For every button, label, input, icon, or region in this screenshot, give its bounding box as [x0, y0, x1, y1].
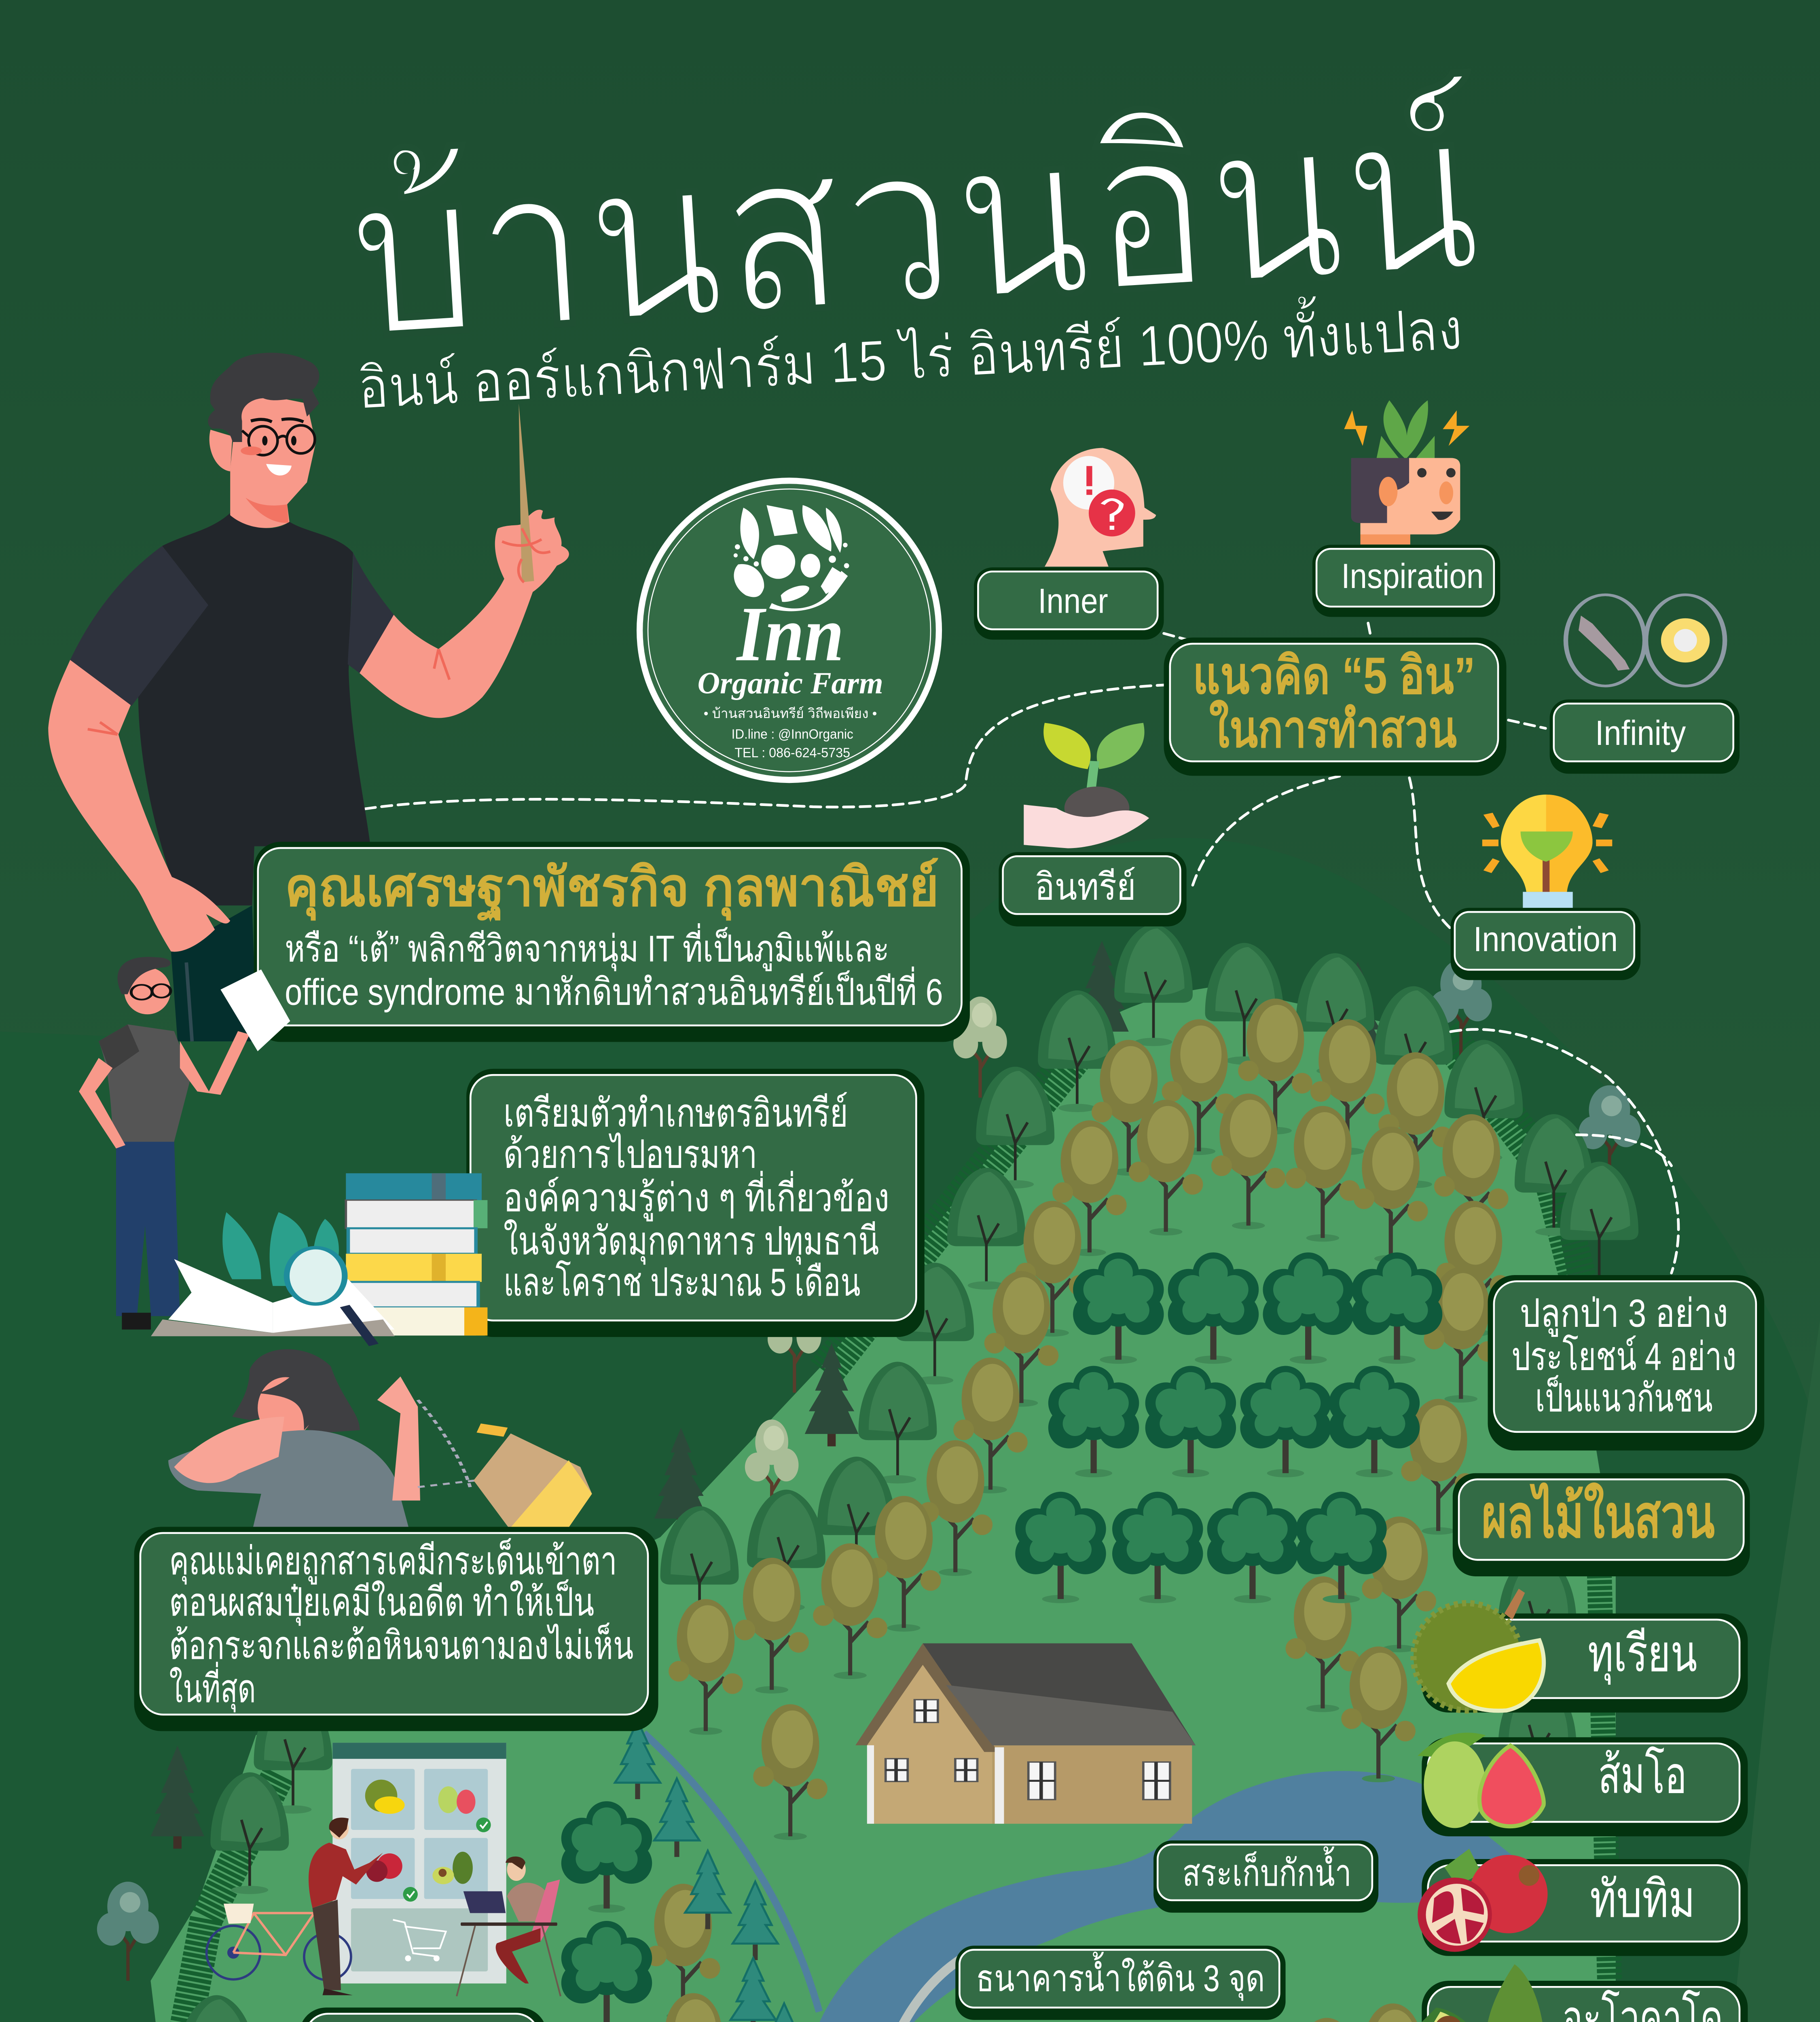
books and open book: [151, 1173, 487, 1345]
fruit row: pomegranate: [1418, 1849, 1748, 1956]
box: Innovation: Innovation: [1473, 920, 1618, 959]
presenter man illustration: [48, 353, 569, 1041]
farm field: [150, 986, 1616, 2022]
box: Inner: Inner: [1038, 581, 1108, 620]
box: training: ในจังหวัดมุกดาหาร ปทุมธานี: [504, 1219, 879, 1265]
box: concept of 5 inn: แนวคิด “5 อิน”: [1193, 647, 1475, 704]
box: mother story: คุณแม่เคยถูกสารเคมีกระเด็นเข้าตา: [169, 1538, 617, 1585]
box: owner introduction: คุณเศรษฐาพัชรกิจ กุลพาณิชย์: [285, 858, 939, 922]
box: owner introduction: หรือ “เต้” พลิกชีวิตจากหนุ่ม IT ที่เป็นภูมิแพ้และ: [285, 923, 889, 972]
box: online sales: [299, 2007, 547, 2022]
farmhouse: [855, 1643, 1196, 1824]
box: concept of 5 inn: ในการทำสวน: [1209, 700, 1457, 758]
box: groundwater bank label: [955, 1946, 1286, 2020]
icon: inspiration head: [1344, 400, 1469, 544]
online shop illustration: [207, 1743, 561, 1996]
pale bushy trees: [97, 959, 1640, 2022]
dashed connector: man to concept: [365, 685, 1164, 809]
box: mother story: ในที่สุด: [169, 1662, 256, 1713]
logo: Inn Organic Farm: Organic Farm: [697, 666, 883, 700]
small man illustration: [79, 957, 290, 1330]
box: windbreak forest: ปลูกป่า 3 อย่าง: [1520, 1291, 1728, 1337]
box: Inner: [974, 567, 1164, 640]
forest trees: [178, 924, 1638, 2022]
mixed orchard pines: [615, 1721, 1007, 2022]
subtitle: อินน์ ออร์แกนิกฟาร์ม 15 ไร่ อินทรีย์ 100% ทั้งแปลง: [356, 288, 1464, 421]
box: pond label: สระเก็บกักน้ำ: [1182, 1846, 1352, 1894]
icon: infinity gears: [1566, 595, 1725, 686]
fruit row: durian: ทุเรียน: [1588, 1625, 1697, 1685]
durian trees: [561, 1252, 1442, 2022]
logo emblem: [734, 505, 849, 611]
icon: inner head: [1045, 448, 1156, 567]
box: groundwater bank label: ธนาคารน้ำใต้ดิน 3 จุด: [976, 1951, 1265, 2001]
box: training: [466, 1069, 925, 1337]
fruit row: avocado: [1412, 1964, 1748, 2022]
box: training: เตรียมตัวทำเกษตรอินทรีย์: [504, 1091, 848, 1135]
box: Inspiration: [1312, 545, 1500, 617]
title: บ้านสวนอินน์: [343, 66, 1486, 383]
fruit row: pomelo: [1418, 1732, 1748, 1836]
box: Inspiration: Inspiration: [1341, 556, 1484, 596]
box: organic: อินทรีย์: [1035, 866, 1136, 907]
box: fruit heading: [1453, 1473, 1750, 1576]
box: mother story: [134, 1527, 658, 1731]
box: windbreak forest: ประโยชน์ 4 อย่าง: [1511, 1335, 1736, 1379]
box: Infinity: Infinity: [1595, 713, 1686, 753]
dark pines: [150, 941, 1384, 2022]
dashed connector: forest line: [1451, 1029, 1678, 1273]
box: training: และโคราช ประมาณ 5 เดือน: [504, 1260, 861, 1304]
fruit row: durian: [1414, 1589, 1748, 1713]
fruit row: pomegranate: ทับทิม: [1590, 1871, 1695, 1928]
box: organic: [999, 852, 1187, 926]
woman with chemical spray: [168, 1349, 592, 1527]
box: owner introduction: [254, 842, 970, 1042]
box: training: องค์ความรู้ต่าง ๆ ที่เกี่ยวข้อง: [504, 1171, 889, 1221]
logo: Inn Organic Farm: Inn: [736, 590, 844, 677]
box: Infinity: [1550, 700, 1740, 774]
box: owner introduction: office syndrome มาหักดิบทำสวนอินทรีย์เป็นปีที่ 6: [285, 967, 943, 1013]
dashed connectors around concept: [1164, 623, 1545, 929]
fruit row: pomelo: ส้มโอ: [1598, 1747, 1687, 1804]
box: training: ด้วยการไปอบรมหา: [504, 1132, 757, 1176]
box: concept of 5 inn: [1164, 638, 1506, 776]
icon: seedling in hand: [1024, 723, 1149, 848]
box: windbreak forest: เป็นแนวกันชน: [1535, 1375, 1713, 1420]
logo: Inn Organic Farm: • บ้านสวนอินทรีย์ วิถีพอเพียง •: [704, 706, 877, 721]
box: Innovation: [1451, 908, 1640, 980]
grass borders: [176, 1032, 1610, 2022]
box: fruit heading: ผลไม้ในสวน: [1481, 1482, 1715, 1550]
water pipe: [784, 1956, 1265, 2022]
logo: Inn Organic Farm: TEL : 086-624-5735: [734, 745, 850, 760]
box: pond label: [1153, 1840, 1378, 1913]
mangosteen trees: [646, 998, 1511, 2022]
pond and river: [644, 1733, 1527, 2022]
icon: light bulb with plant: [1482, 795, 1612, 908]
box: mother story: ต้อกระจกและต้อหินจนตามองไม่เห็น: [169, 1622, 633, 1667]
logo: Inn Organic Farm: [637, 478, 942, 783]
box: mother story: ตอนผสมปุ๋ยเคมีในอดีต ทำให้เป็น: [169, 1579, 594, 1626]
logo: Inn Organic Farm: ID.line : @InnOrganic: [732, 727, 853, 742]
box: windbreak forest: [1488, 1275, 1764, 1451]
